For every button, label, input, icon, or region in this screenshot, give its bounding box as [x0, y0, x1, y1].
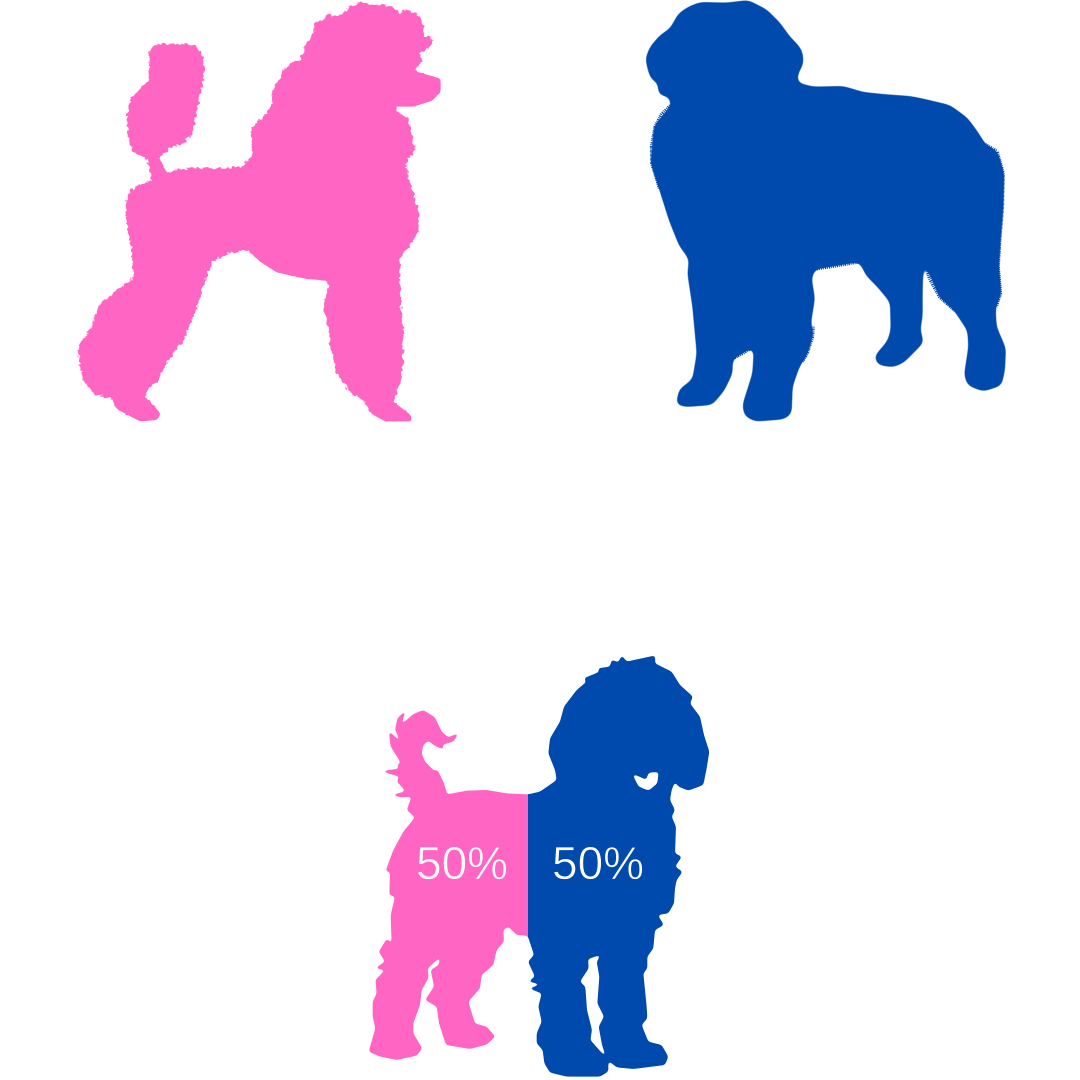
fur: front leg	[802, 327, 813, 362]
label: pink 50%: 50%	[416, 837, 508, 889]
icon: pink poodle silhouette	[77, 0, 441, 421]
fur: belly	[815, 261, 860, 269]
belly: smooth edge	[247, 247, 330, 281]
fur: between front legs	[732, 346, 754, 358]
fur: rear leg inner	[925, 263, 955, 310]
hind foot: smooth edge	[112, 383, 161, 421]
front foot: smooth edge	[365, 383, 412, 421]
chart: split dog silhouette 50/50	[369, 655, 709, 1077]
muzzle: smooth edge	[393, 69, 441, 107]
fur: rear	[985, 145, 1003, 307]
icon: blue half of dog	[528, 656, 710, 1077]
icon: blue long-haired dog silhouette	[645, 0, 1006, 422]
fur: chest	[652, 106, 671, 188]
label: blue 50%: 50%	[552, 837, 644, 889]
tail notch: background gap beside the stem	[159, 157, 177, 173]
icon: pink half of dog	[369, 710, 528, 1060]
tail stem	[147, 155, 167, 182]
